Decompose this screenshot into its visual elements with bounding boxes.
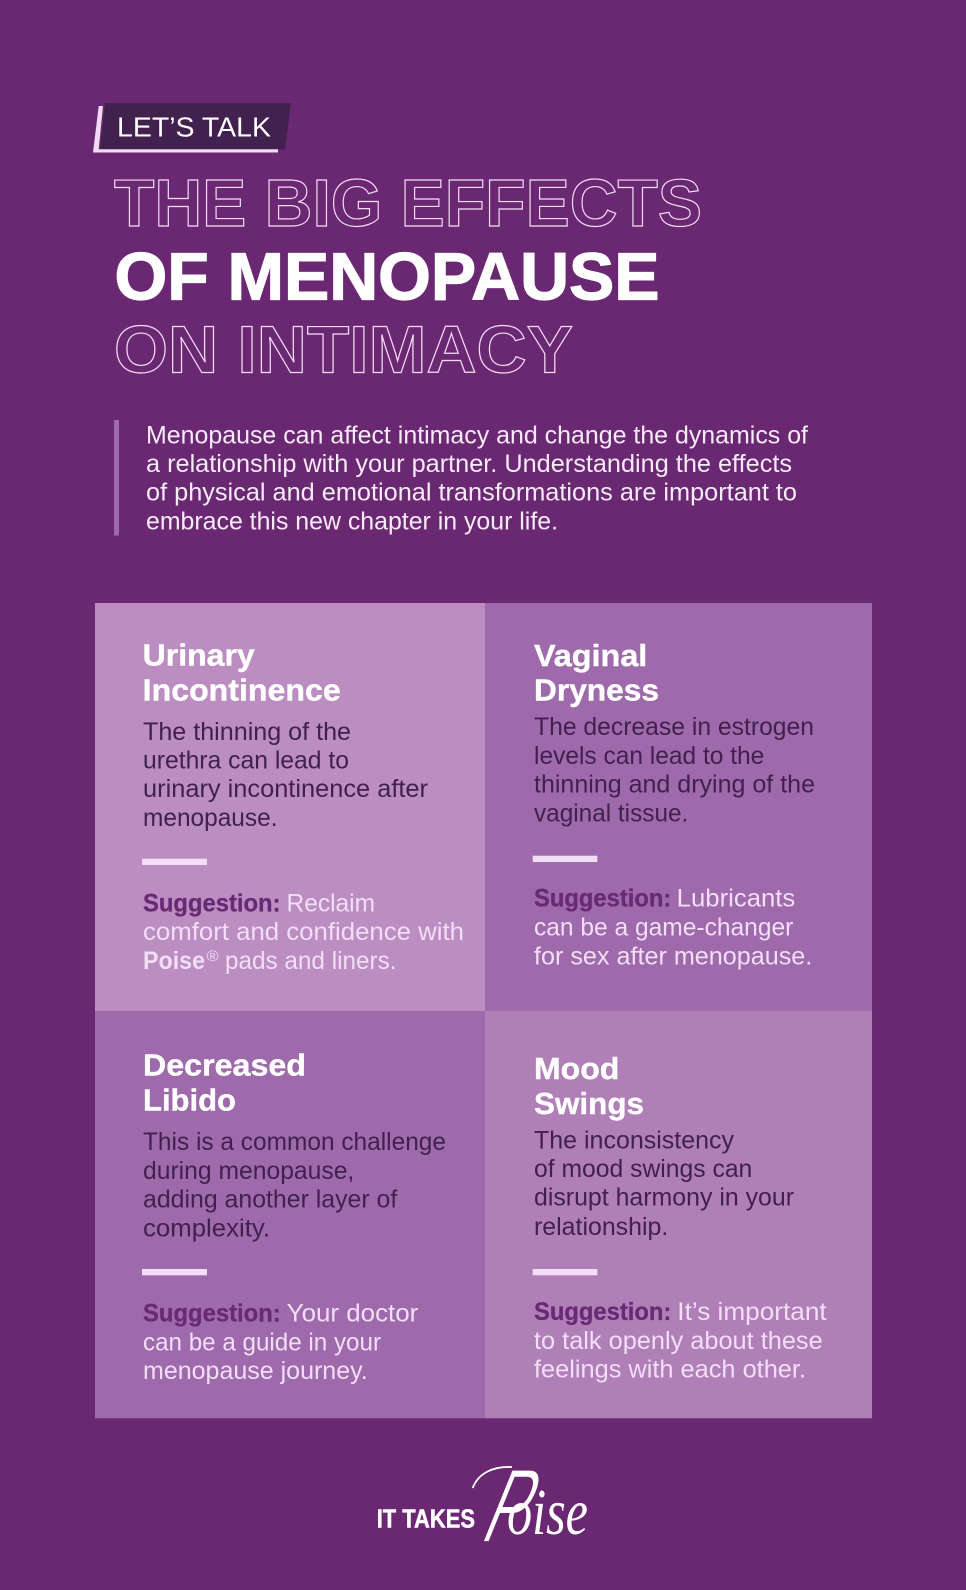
intro text block: Menopause can affect intimacy and change the dynamics of bbox=[146, 421, 808, 449]
logo: It Takes Poise: oise bbox=[507, 1476, 588, 1549]
suggestion: decreased libido: menopause journey. bbox=[143, 1357, 368, 1385]
tag: Let's Talk bbox=[93, 103, 291, 152]
suggestion: vaginal dryness: Suggestion: bbox=[534, 885, 671, 913]
tag: Let's Talk: LET’S TALK bbox=[117, 112, 271, 142]
suggestion: vaginal dryness: Lubricants bbox=[677, 885, 795, 913]
suggestion: mood swings: feelings with each other. bbox=[534, 1356, 806, 1384]
logo: It Takes Poise bbox=[377, 1448, 588, 1565]
heading: vaginal dryness: Dryness bbox=[534, 673, 659, 708]
suggestion: mood swings bbox=[534, 1298, 827, 1384]
heading: decreased libido bbox=[143, 1048, 306, 1118]
suggestion: decreased libido bbox=[143, 1300, 418, 1385]
description: mood swings: disrupt harmony in your bbox=[534, 1184, 794, 1212]
heading: urinary incontinence: Incontinence bbox=[143, 673, 341, 708]
intro text block: a relationship with your partner. Understanding the effects bbox=[146, 450, 792, 478]
logo: It Takes Poise: P bbox=[469, 1448, 557, 1565]
suggestion: decreased libido: Suggestion: bbox=[143, 1300, 281, 1328]
title bbox=[114, 166, 702, 388]
description: vaginal dryness: thinning and drying of the bbox=[534, 770, 815, 798]
description: mood swings bbox=[534, 1126, 794, 1241]
suggestion: urinary incontinence: Suggestion: bbox=[143, 890, 280, 918]
title: THE BIG EFFECTS bbox=[114, 166, 702, 241]
panel: urinary incontinence bbox=[95, 603, 485, 1011]
heading: mood swings: Swings bbox=[534, 1086, 644, 1121]
heading: urinary incontinence bbox=[143, 638, 341, 708]
heading: mood swings: Mood bbox=[534, 1051, 619, 1086]
suggestion: vaginal dryness: can be a game-changer bbox=[534, 914, 793, 942]
panel: decreased libido bbox=[95, 1011, 485, 1418]
suggestion: mood swings: to talk openly about these bbox=[534, 1327, 823, 1355]
heading: urinary incontinence: Urinary bbox=[143, 638, 255, 672]
logo: It Takes Poise: IT TAKES bbox=[377, 1503, 475, 1533]
panel: vaginal dryness bbox=[485, 603, 872, 1011]
description: decreased libido bbox=[143, 1128, 446, 1243]
suggestion: urinary incontinence bbox=[143, 890, 464, 975]
description: vaginal dryness bbox=[534, 713, 815, 827]
panel: mood swings bbox=[485, 1011, 872, 1418]
title: ON INTIMACY bbox=[114, 312, 573, 388]
suggestion: urinary incontinence: pads and liners. bbox=[225, 947, 396, 975]
heading: decreased libido: Libido bbox=[143, 1083, 236, 1118]
suggestion: urinary incontinence: comfort and confidence with bbox=[143, 918, 464, 946]
heading: mood swings bbox=[534, 1051, 644, 1121]
suggestion: urinary incontinence: ® bbox=[206, 948, 218, 965]
description: decreased libido: adding another layer of bbox=[143, 1185, 397, 1213]
description: urinary incontinence: urethra can lead to bbox=[143, 747, 349, 775]
heading: vaginal dryness: Vaginal bbox=[534, 638, 647, 673]
heading: decreased libido: Decreased bbox=[143, 1048, 306, 1083]
description: urinary incontinence: urinary incontinence after bbox=[143, 775, 428, 803]
intro text block bbox=[114, 420, 808, 536]
suggestion: decreased libido: Your doctor bbox=[287, 1300, 418, 1328]
suggestion: vaginal dryness bbox=[534, 885, 812, 970]
suggestion: mood swings: Suggestion: bbox=[534, 1298, 671, 1326]
suggestion: vaginal dryness: for sex after menopause. bbox=[534, 942, 812, 970]
description: decreased libido: complexity. bbox=[143, 1215, 270, 1243]
intro text block: embrace this new chapter in your life. bbox=[146, 507, 558, 535]
heading: vaginal dryness bbox=[534, 638, 659, 708]
description: decreased libido: during menopause, bbox=[143, 1157, 354, 1185]
description: mood swings: relationship. bbox=[534, 1213, 668, 1241]
description: decreased libido: This is a common challenge bbox=[143, 1128, 446, 1156]
intro text block: of physical and emotional transformations are important to bbox=[146, 479, 797, 507]
title: OF MENOPAUSE bbox=[114, 240, 660, 314]
suggestion: urinary incontinence: Poise bbox=[143, 947, 205, 975]
description: urinary incontinence: The thinning of the bbox=[143, 718, 351, 746]
suggestion: mood swings: It’s important bbox=[677, 1298, 827, 1326]
description: mood swings: of mood swings can bbox=[534, 1155, 752, 1183]
description: vaginal dryness: vaginal tissue. bbox=[534, 799, 688, 827]
suggestion: urinary incontinence: Reclaim bbox=[286, 890, 375, 918]
description: urinary incontinence bbox=[143, 718, 428, 832]
suggestion: decreased libido: can be a guide in your bbox=[143, 1329, 381, 1357]
description: mood swings: The inconsistency bbox=[534, 1126, 734, 1154]
description: vaginal dryness: The decrease in estrogen bbox=[534, 713, 814, 741]
description: urinary incontinence: menopause. bbox=[143, 804, 278, 832]
description: vaginal dryness: levels can lead to the bbox=[534, 742, 764, 770]
